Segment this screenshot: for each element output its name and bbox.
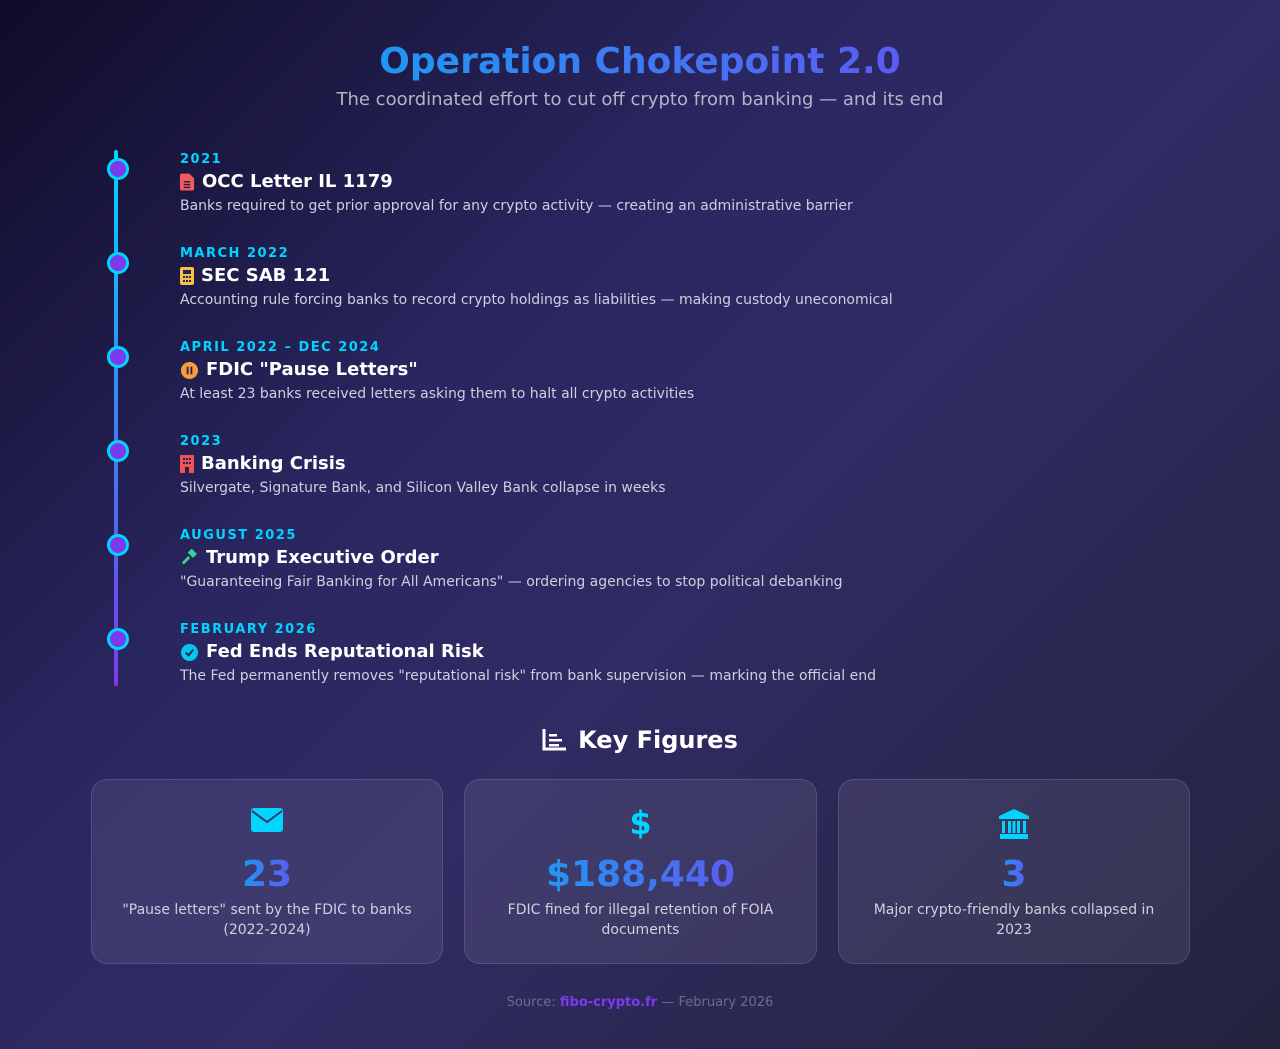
title with icon: SEC SAB 121 — [201, 265, 330, 286]
event: 2021: 2021 — [180, 152, 222, 167]
event: 2023: Silvergate, Signature Bank, and Silicon Valley Bank collapse in weeks — [180, 480, 666, 496]
dot 3 — [107, 346, 129, 368]
card: $188,440 — [464, 779, 817, 964]
event: 2023 — [180, 434, 666, 496]
event: February 2026: The Fed permanently removes "reputational risk" from bank supervision — marking the official end — [180, 668, 876, 684]
card: $188,440: $188,440 — [546, 854, 735, 895]
card: 3: 3 — [1001, 854, 1027, 895]
event: August 2025 — [180, 528, 843, 590]
card: 3 — [838, 779, 1190, 964]
event: March 2022: Accounting rule forcing banks to record crypto holdings as liabilities — making custody uneconomical — [180, 292, 893, 308]
icon: bank — [999, 809, 1029, 839]
icon: dollar: $ — [629, 804, 652, 842]
event: August 2025: AUGUST 2025 — [180, 528, 297, 543]
event: March 2022 — [180, 246, 893, 308]
dot 6 — [107, 628, 129, 650]
title: Operation Chokepoint 2.0 — [379, 41, 901, 82]
title with icon: Trump Executive Order — [206, 547, 439, 568]
icon: envelope — [251, 808, 283, 832]
event: August 2025: "Guaranteeing Fair Banking for All Americans" — ordering agencies to stop political debanking — [180, 574, 843, 590]
event: April 2022 - Dec 2024: APRIL 2022 – DEC 2024 — [180, 340, 380, 355]
source footer: Source: fibo-crypto.fr — February 2026 — [507, 995, 773, 1010]
dot 2 — [107, 252, 129, 274]
title with icon: Fed Ends Reputational Risk — [206, 641, 484, 662]
event: 2021 — [180, 152, 853, 214]
card: 3: Major crypto-friendly banks collapsed in 2023 — [874, 902, 1154, 938]
timeline line — [114, 150, 118, 686]
card: 23: 23 — [242, 854, 292, 895]
key figures heading: Key Figures — [578, 726, 738, 754]
dot 1 — [107, 158, 129, 180]
card: 23 — [91, 779, 443, 964]
title with icon: OCC Letter IL 1179 — [202, 171, 393, 192]
title with icon: FDIC "Pause Letters" — [206, 359, 418, 380]
event: April 2022 - Dec 2024 — [180, 340, 694, 402]
dot 4 — [107, 440, 129, 462]
subtitle: The coordinated effort to cut off crypto from banking — and its end — [336, 89, 944, 110]
event: April 2022 - Dec 2024: At least 23 banks received letters asking them to halt all crypto activities — [180, 386, 694, 402]
card: 23: "Pause letters" sent by the FDIC to banks (2022-2024) — [122, 902, 412, 938]
card: $188,440: FDIC fined for illegal retention of FOIA documents — [508, 902, 773, 938]
event: February 2026: FEBRUARY 2026 — [180, 622, 317, 637]
event: 2023: 2023 — [180, 434, 222, 449]
event: March 2022: MARCH 2022 — [180, 246, 289, 261]
title with icon: Banking Crisis — [201, 453, 346, 474]
dot 5 — [107, 534, 129, 556]
event: 2021: Banks required to get prior approval for any crypto activity — creating an administrative barrier — [180, 198, 853, 214]
event: February 2026 — [180, 622, 876, 684]
